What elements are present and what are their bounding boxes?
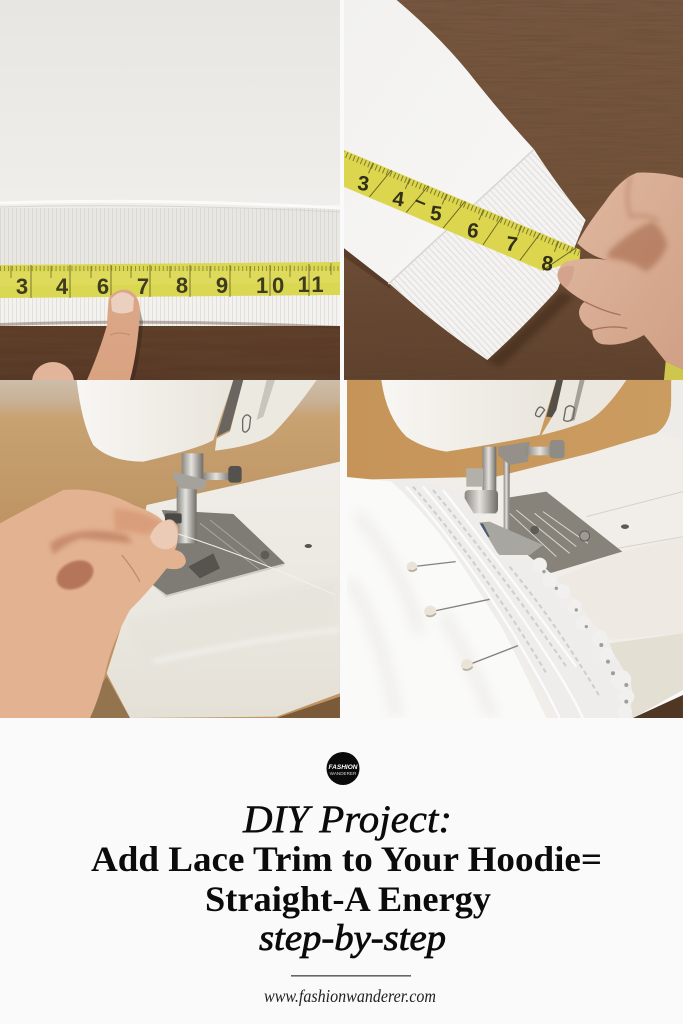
sewing machine base bbox=[343, 380, 683, 718]
measuring tape with numbers: 3 bbox=[16, 274, 28, 299]
title line: DIY Project: DIY Project: bbox=[242, 798, 452, 841]
icon: pearl-head pins bbox=[407, 562, 518, 671]
icon: pointing finger bbox=[32, 290, 143, 380]
hoodie sleeve bbox=[344, 0, 534, 289]
needle plate bbox=[510, 492, 622, 573]
logo badge: WANDERER bbox=[330, 771, 357, 776]
website url: www.fashionwanderer.com bbox=[264, 986, 436, 1006]
tan background wall bbox=[343, 380, 683, 487]
ribbed hem band bbox=[0, 199, 340, 329]
measuring tape with numbers: 10 bbox=[256, 273, 288, 298]
title line: Add Lace Trim: Add Lace Trim to Your Hoodie= bbox=[91, 839, 602, 879]
tape end bbox=[664, 362, 683, 380]
measuring tape with numbers: 7 bbox=[504, 232, 519, 257]
sweatshirt body bbox=[0, 0, 340, 205]
title line: step-by-step: step-by-step bbox=[259, 918, 446, 959]
panel: sewing lace onto the hoodie bbox=[343, 380, 683, 719]
logo badge bbox=[326, 752, 360, 785]
measuring tape with numbers: 6 bbox=[97, 274, 109, 299]
ribbed cuff bbox=[388, 149, 586, 367]
measuring tape with numbers: 7 bbox=[137, 274, 149, 299]
machine head bbox=[77, 380, 317, 462]
measuring tape with numbers bbox=[344, 150, 580, 271]
wood table surface bbox=[344, 0, 683, 380]
measuring tape with numbers: 11 bbox=[298, 272, 326, 297]
machine needle assembly bbox=[165, 453, 242, 543]
measuring tape with numbers: 3 bbox=[356, 172, 371, 196]
measuring tape with numbers: 6 bbox=[466, 219, 480, 243]
lace trim bbox=[390, 480, 634, 719]
thread bbox=[178, 534, 335, 595]
tan background wall bbox=[0, 380, 340, 718]
panel: measuring the sleeve cuff bbox=[311, 0, 683, 380]
icon: hand holding thread bbox=[0, 489, 186, 718]
white hoodie fabric bbox=[343, 477, 546, 718]
icon: thread guide symbols bbox=[535, 406, 575, 421]
machine needle assembly bbox=[465, 440, 565, 555]
wood table surface bbox=[0, 326, 340, 380]
needle plate bbox=[148, 510, 312, 597]
measuring tape with numbers: 4 bbox=[56, 274, 69, 299]
icon: hand pinching tape bbox=[557, 173, 683, 370]
measuring tape with numbers: 5 bbox=[429, 202, 443, 226]
machine head bbox=[381, 380, 626, 452]
title line: Straight-A Energy: Straight-A Energy bbox=[205, 879, 491, 919]
logo badge: FASHION bbox=[329, 764, 358, 771]
panel: measuring the hoodie hem bbox=[0, 0, 340, 402]
measuring tape with numbers: 9 bbox=[216, 273, 228, 298]
sewing machine base bbox=[80, 462, 340, 718]
measuring tape with numbers: – bbox=[411, 189, 430, 214]
measuring tape with numbers: 4 bbox=[391, 187, 406, 212]
measuring tape with numbers: 8 bbox=[176, 273, 188, 298]
divider rule bbox=[291, 975, 411, 977]
measuring tape with numbers: 8 bbox=[540, 252, 555, 276]
measuring tape with numbers bbox=[0, 262, 340, 299]
title bbox=[91, 798, 602, 959]
panel: threading the sewing machine bbox=[0, 380, 340, 718]
icon: thread guide symbol bbox=[243, 415, 251, 432]
